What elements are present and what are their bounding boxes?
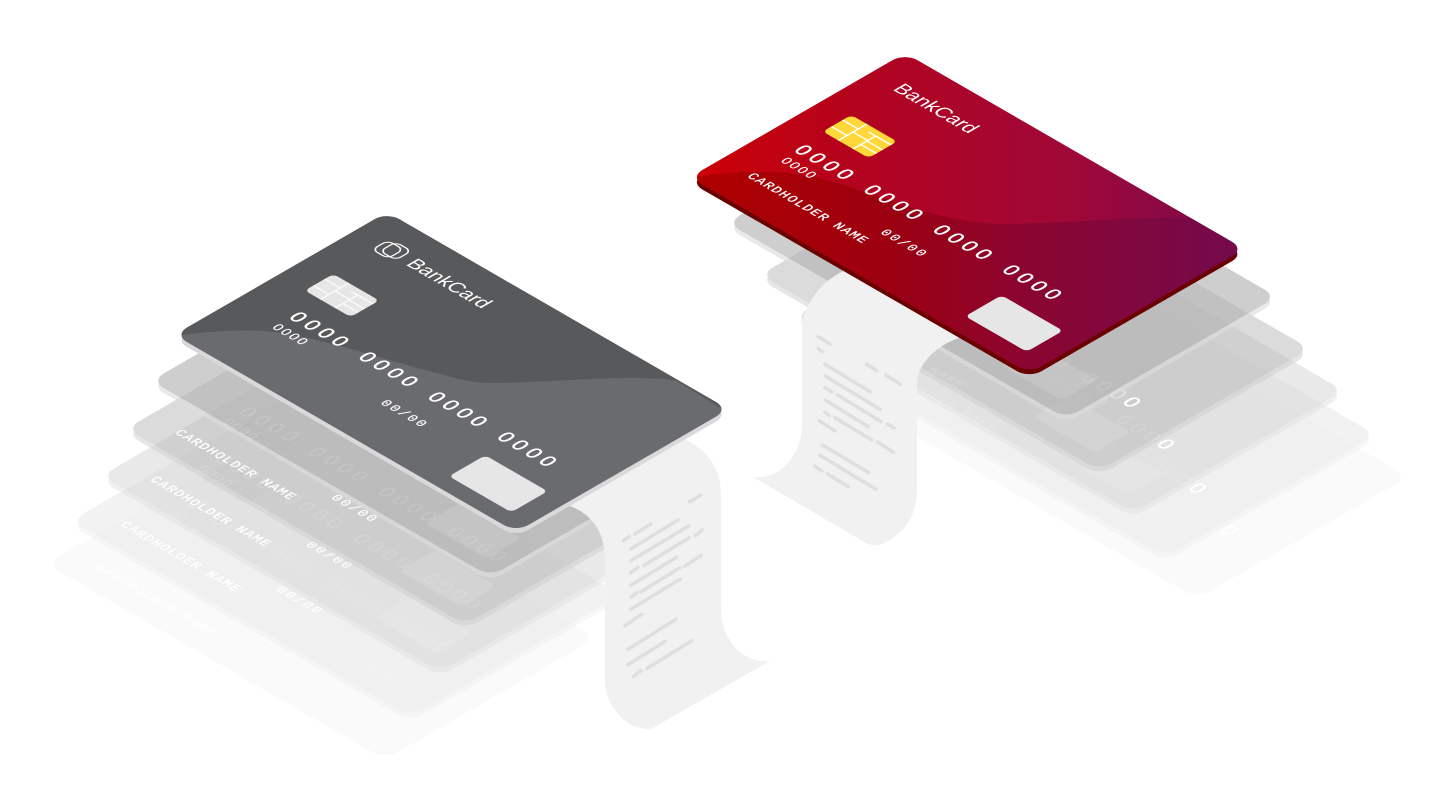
left stack: ghost card 3: 0000 xyxy=(347,531,422,574)
left stack: ghost card 2: 0000 xyxy=(303,444,377,487)
left stack: ghost card 1 xyxy=(147,259,705,582)
left stack: ghost card 4: 0000 xyxy=(386,616,461,659)
right stack: ghost card 2: 000 xyxy=(1075,370,1136,405)
card number: 0000 xyxy=(789,142,863,185)
right stack: ghost card 4: 0 xyxy=(1183,480,1216,499)
left stack: ghost card 5: 0000 xyxy=(139,551,184,577)
dark card edge xyxy=(174,217,729,537)
card number: 0000 xyxy=(422,389,497,432)
left stack: ghost card 3 xyxy=(97,354,655,676)
expiry: 00/00 xyxy=(376,398,432,430)
left stack: ghost card 5 xyxy=(46,442,596,760)
left receipt xyxy=(560,437,770,729)
right stack: ghost card 5: 0000 xyxy=(1035,418,1109,461)
right stack: ghost card 1 xyxy=(723,101,1281,424)
card number: 0000 xyxy=(284,309,358,352)
receipt text lines xyxy=(623,495,702,677)
left stack: ghost card 4: 0000 xyxy=(317,576,392,619)
right stack: ghost card 2 xyxy=(756,153,1314,476)
signature panel xyxy=(965,295,1063,352)
right stack: ghost card 3 xyxy=(790,195,1348,518)
right stack: ghost card 3: 0000 xyxy=(1040,372,1115,415)
signature panel xyxy=(449,455,548,512)
card number xyxy=(789,142,1071,305)
left stack: ghost card 2: 0000 xyxy=(372,484,447,527)
dark bank card xyxy=(182,216,722,533)
red card edge xyxy=(690,58,1244,378)
left stack: ghost card 5: 0000 xyxy=(154,539,228,582)
left stack: ghost card 5: 0000 xyxy=(292,619,367,662)
chip xyxy=(823,115,897,158)
left stack: ghost card 2 xyxy=(122,307,680,630)
left stack: ghost card 2: 0000 xyxy=(441,524,516,567)
dark card face xyxy=(182,216,722,528)
card number: 0000 xyxy=(353,349,427,392)
left stack: ghost card 4: 0000 xyxy=(248,536,322,579)
left stack: ghost card 3: 00/00 xyxy=(302,539,358,572)
brand name: BankCard xyxy=(888,81,984,136)
left stack: ghost card 5: 00/00 xyxy=(247,627,303,660)
left stack: ghost card 4: 00/00 xyxy=(272,584,328,617)
right receipt xyxy=(753,268,962,545)
left stack: ghost card 3: CARDHOLDER NAME xyxy=(146,474,276,549)
right stack: ghost card 5: 0000 xyxy=(1104,458,1179,501)
right stack: ghost card 4: CARDHOLDER NAME xyxy=(871,359,1001,434)
right stack: ghost card 4 xyxy=(822,239,1380,562)
left stack: ghost card 5: CARDHOLDER NAME xyxy=(91,562,221,637)
left stack: ghost card 3: 0000 xyxy=(194,463,239,489)
logo xyxy=(372,239,411,262)
left stack: ghost card 4 xyxy=(67,399,625,722)
card number xyxy=(284,309,566,472)
card number: 0000 xyxy=(858,182,932,225)
receipt text lines xyxy=(815,337,900,489)
right stack: ghost card 2: 0000 xyxy=(1006,330,1081,373)
illustration: bank cards and receipts xyxy=(78,57,1369,729)
right stack: ghost card 3: CARDHOLDER NAME xyxy=(839,315,969,390)
card number: 0000 xyxy=(491,429,566,472)
right stack: ghost card 2: 0000 xyxy=(868,250,942,293)
right stack: ghost card 4: 0000 xyxy=(1003,376,1077,419)
left stack: ghost card 3: 0000 xyxy=(278,491,352,534)
left stack: ghost card 4: CARDHOLDER NAME xyxy=(116,519,246,594)
right stack: ghost card 5: 000 xyxy=(1173,498,1234,533)
right stack: ghost card 4: 0000 xyxy=(1072,416,1147,459)
cardholder name: CARDHOLDER NAME xyxy=(743,171,873,246)
right stack: ghost card 5: 0000 xyxy=(966,378,1040,421)
brand name: BankCard xyxy=(401,256,497,311)
right stack: ghost card 3: 0000 xyxy=(902,292,976,335)
left stack: ghost card 2: CARDHOLDER NAME xyxy=(171,427,301,502)
left stack: ghost card 3: 0000 xyxy=(209,451,283,494)
left stack: ghost card 2: 0000 xyxy=(234,404,308,447)
dark card contents xyxy=(214,239,688,512)
right stack: ghost card 2: 0000 xyxy=(937,290,1011,333)
expiry: 00/00 xyxy=(876,227,932,260)
chip xyxy=(305,274,379,317)
left stack: ghost card 4: 0000 xyxy=(164,508,209,534)
right stack: ghost card 2: 0 xyxy=(1117,394,1150,413)
left stack: ghost card 3: 0000 xyxy=(416,571,491,614)
small number: 0000 xyxy=(269,322,314,348)
right stack: ghost card 5 xyxy=(858,281,1408,598)
right stack: ghost card 4: 000 xyxy=(1141,456,1202,491)
right stack: ghost card 3: 0 xyxy=(1151,436,1184,455)
right stack: ghost card 5: 0 xyxy=(1215,522,1248,541)
right stack: ghost card 4: 0000 xyxy=(934,336,1008,379)
small number: 0000 xyxy=(777,155,822,181)
right stack: ghost card 3: 000 xyxy=(1109,412,1170,447)
red card contents xyxy=(732,81,1201,352)
right stack: ghost card 5: CARDHOLDER NAME xyxy=(903,401,1033,476)
right stack: ghost card 3: 0000 xyxy=(971,332,1045,375)
left stack: ghost card 2: 00/00 xyxy=(327,492,383,525)
red bank card xyxy=(696,57,1238,374)
red card face xyxy=(696,57,1238,370)
card number: 0000 xyxy=(927,222,1002,265)
left stack: ghost card 2: 0000 xyxy=(219,416,264,442)
left stack: ghost card 4: 0000 xyxy=(179,496,253,539)
left stack: ghost card 5: 0000 xyxy=(223,579,297,622)
card number: 0000 xyxy=(996,262,1071,305)
left stack: ghost card 5: 0000 xyxy=(361,659,436,702)
